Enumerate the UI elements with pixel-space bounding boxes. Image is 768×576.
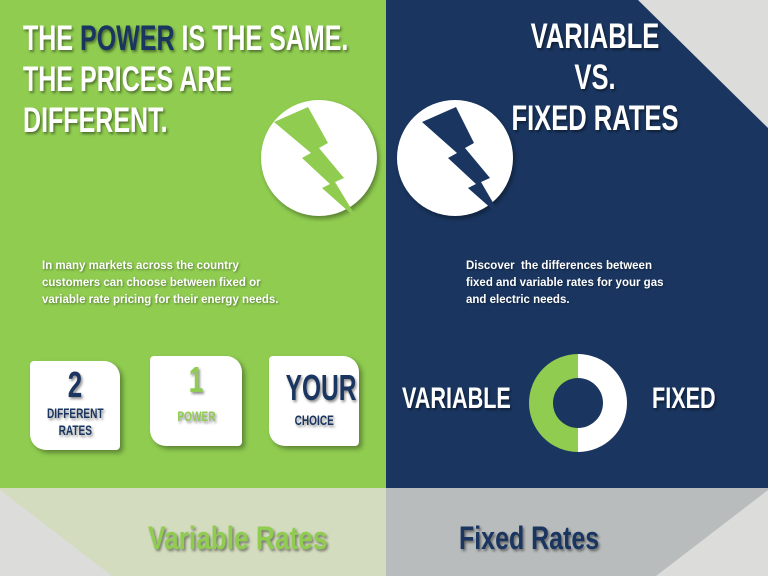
icon: navy lightning circle — [397, 100, 516, 220]
title: right: VS. — [574, 58, 616, 97]
label: variable: VARIABLE — [402, 382, 511, 415]
card: your choice: YOUR — [286, 367, 356, 408]
label: fixed: FIXED — [652, 382, 716, 415]
title: left — [23, 19, 350, 140]
card: 2 different rates — [30, 361, 120, 450]
card: 1 power: POWER — [177, 408, 215, 424]
title: right: VARIABLE — [531, 17, 659, 56]
card: your choice: CHOICE — [294, 412, 334, 428]
card: 2 different rates: DIFFERENT — [47, 405, 103, 421]
icon: green lightning circle — [260, 100, 382, 222]
card: 1 power — [150, 356, 242, 446]
title: left: THE POWER IS THE SAME. — [23, 19, 348, 58]
title: left: DIFFERENT. — [23, 101, 168, 140]
card: 1 power: 1 — [189, 359, 203, 400]
chart: donut — [529, 354, 627, 452]
card: your choice — [269, 356, 359, 446]
card: 2 different rates: RATES — [58, 422, 92, 438]
title: right — [511, 17, 680, 138]
heading: fixed rates: Fixed Rates — [459, 520, 599, 556]
title: right: FIXED RATES — [511, 99, 679, 138]
text block: right: Discover the differences between fixed and variable rates for your gas and electric needs. — [466, 260, 664, 306]
card: 2 different rates: 2 — [68, 364, 82, 405]
text block: left: In many markets across the country customers can choose between fixed or variable rate pricing for their energy needs. — [42, 260, 278, 306]
heading: variable rates: Variable Rates — [148, 520, 327, 556]
title: left: THE PRICES ARE — [23, 60, 232, 99]
